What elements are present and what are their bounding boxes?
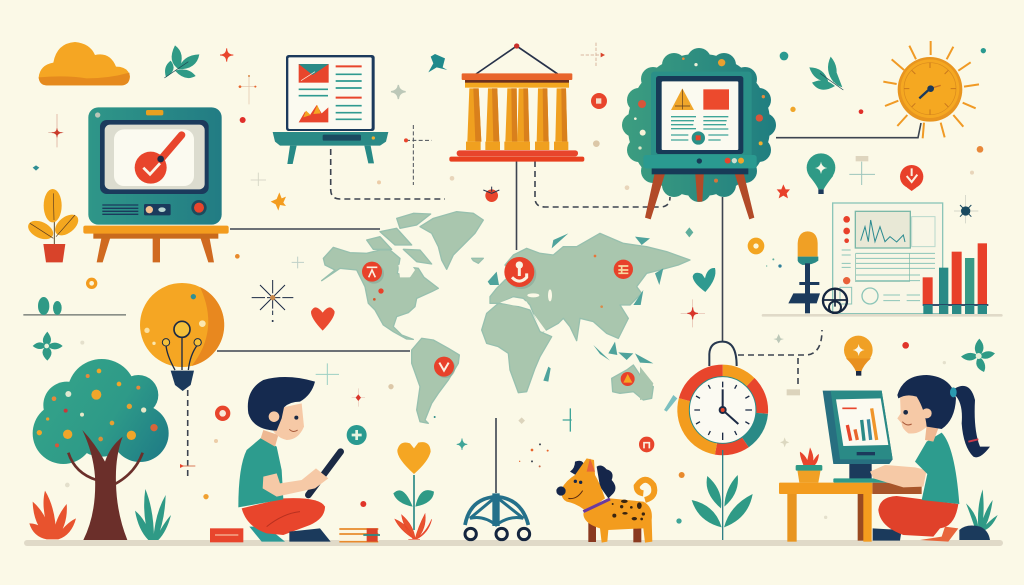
- desk shelf: [762, 314, 1003, 317]
- ground line: [24, 540, 1003, 546]
- light bulb: [140, 283, 224, 391]
- orange ring: [86, 278, 97, 289]
- retro television: [88, 107, 222, 225]
- laptop report screen: [273, 55, 388, 164]
- wooden TV table: [83, 226, 229, 262]
- hanging wire: [476, 43, 558, 74]
- potted plant: [25, 189, 82, 262]
- left upper section: [25, 42, 388, 268]
- map fragments and dots: [639, 334, 946, 524]
- sparkles: [33, 48, 381, 268]
- teal grass plant: [135, 489, 171, 540]
- book stacks: [210, 528, 380, 542]
- data report sheet: [833, 203, 943, 314]
- girl arm: [870, 465, 927, 487]
- scattered dots and sparkles: [625, 48, 986, 327]
- red leaf bush: [29, 491, 76, 539]
- potted red plant: [796, 447, 822, 483]
- screen check mark: [135, 135, 182, 184]
- boy neck and face: [248, 377, 315, 447]
- leaf sprig: [809, 57, 843, 90]
- connector lines: [188, 123, 921, 493]
- padlock clock: [683, 342, 762, 449]
- easel monitor: [643, 72, 757, 219]
- microphone on wheels: [788, 231, 847, 313]
- teal heart: [693, 268, 715, 292]
- dog: [556, 458, 654, 543]
- girl shirt: [915, 433, 959, 504]
- leaf sprig: [164, 45, 199, 78]
- world map: [322, 212, 690, 423]
- map pins: [362, 255, 635, 386]
- museum building: [391, 43, 629, 202]
- small sparkles: [434, 408, 654, 467]
- inland seas and bays: [398, 263, 552, 332]
- right upper section: [622, 41, 1003, 327]
- tree canopy: [33, 359, 169, 464]
- red heart: [311, 307, 335, 331]
- tree: [33, 359, 169, 540]
- museum decor: [391, 43, 629, 202]
- right lower section: [639, 334, 998, 542]
- wheeled stand: [465, 493, 530, 540]
- red badge: [900, 165, 923, 191]
- tablet: [308, 452, 341, 495]
- tree fruit: [37, 369, 158, 447]
- left lower section: [23, 278, 394, 542]
- boy reading tablet: [238, 377, 341, 542]
- cloud: [39, 42, 130, 85]
- orange location bulb: [844, 336, 873, 376]
- teal flower: [961, 339, 995, 372]
- landmasses: [322, 212, 690, 423]
- computer desk: [779, 483, 922, 542]
- bar chart: [923, 243, 988, 314]
- teal location bulb: [807, 153, 835, 194]
- boy shirt: [238, 437, 283, 507]
- boy arm: [263, 468, 328, 497]
- bottom centre section: [393, 408, 654, 543]
- stem plant: [692, 450, 753, 540]
- small sprout on line: [23, 297, 126, 316]
- columns and roof: [449, 73, 584, 162]
- monitor chart: [842, 408, 877, 441]
- backdrop dots: [634, 57, 765, 183]
- sun clock: [883, 41, 979, 138]
- teal flower: [33, 332, 63, 361]
- computer monitor: [823, 391, 893, 483]
- small icons and dots: [65, 341, 394, 507]
- heart flower: [393, 442, 434, 539]
- girl legs: [873, 496, 958, 542]
- girl at computer: [870, 375, 990, 542]
- scalloped monitor backdrop: [622, 48, 776, 202]
- compass sparkle: [252, 280, 293, 322]
- clock ring segments: [683, 371, 762, 449]
- girl head: [897, 375, 990, 457]
- teal plant with rock: [959, 489, 998, 540]
- boy legs and shoes: [242, 498, 331, 542]
- islands: [488, 233, 663, 382]
